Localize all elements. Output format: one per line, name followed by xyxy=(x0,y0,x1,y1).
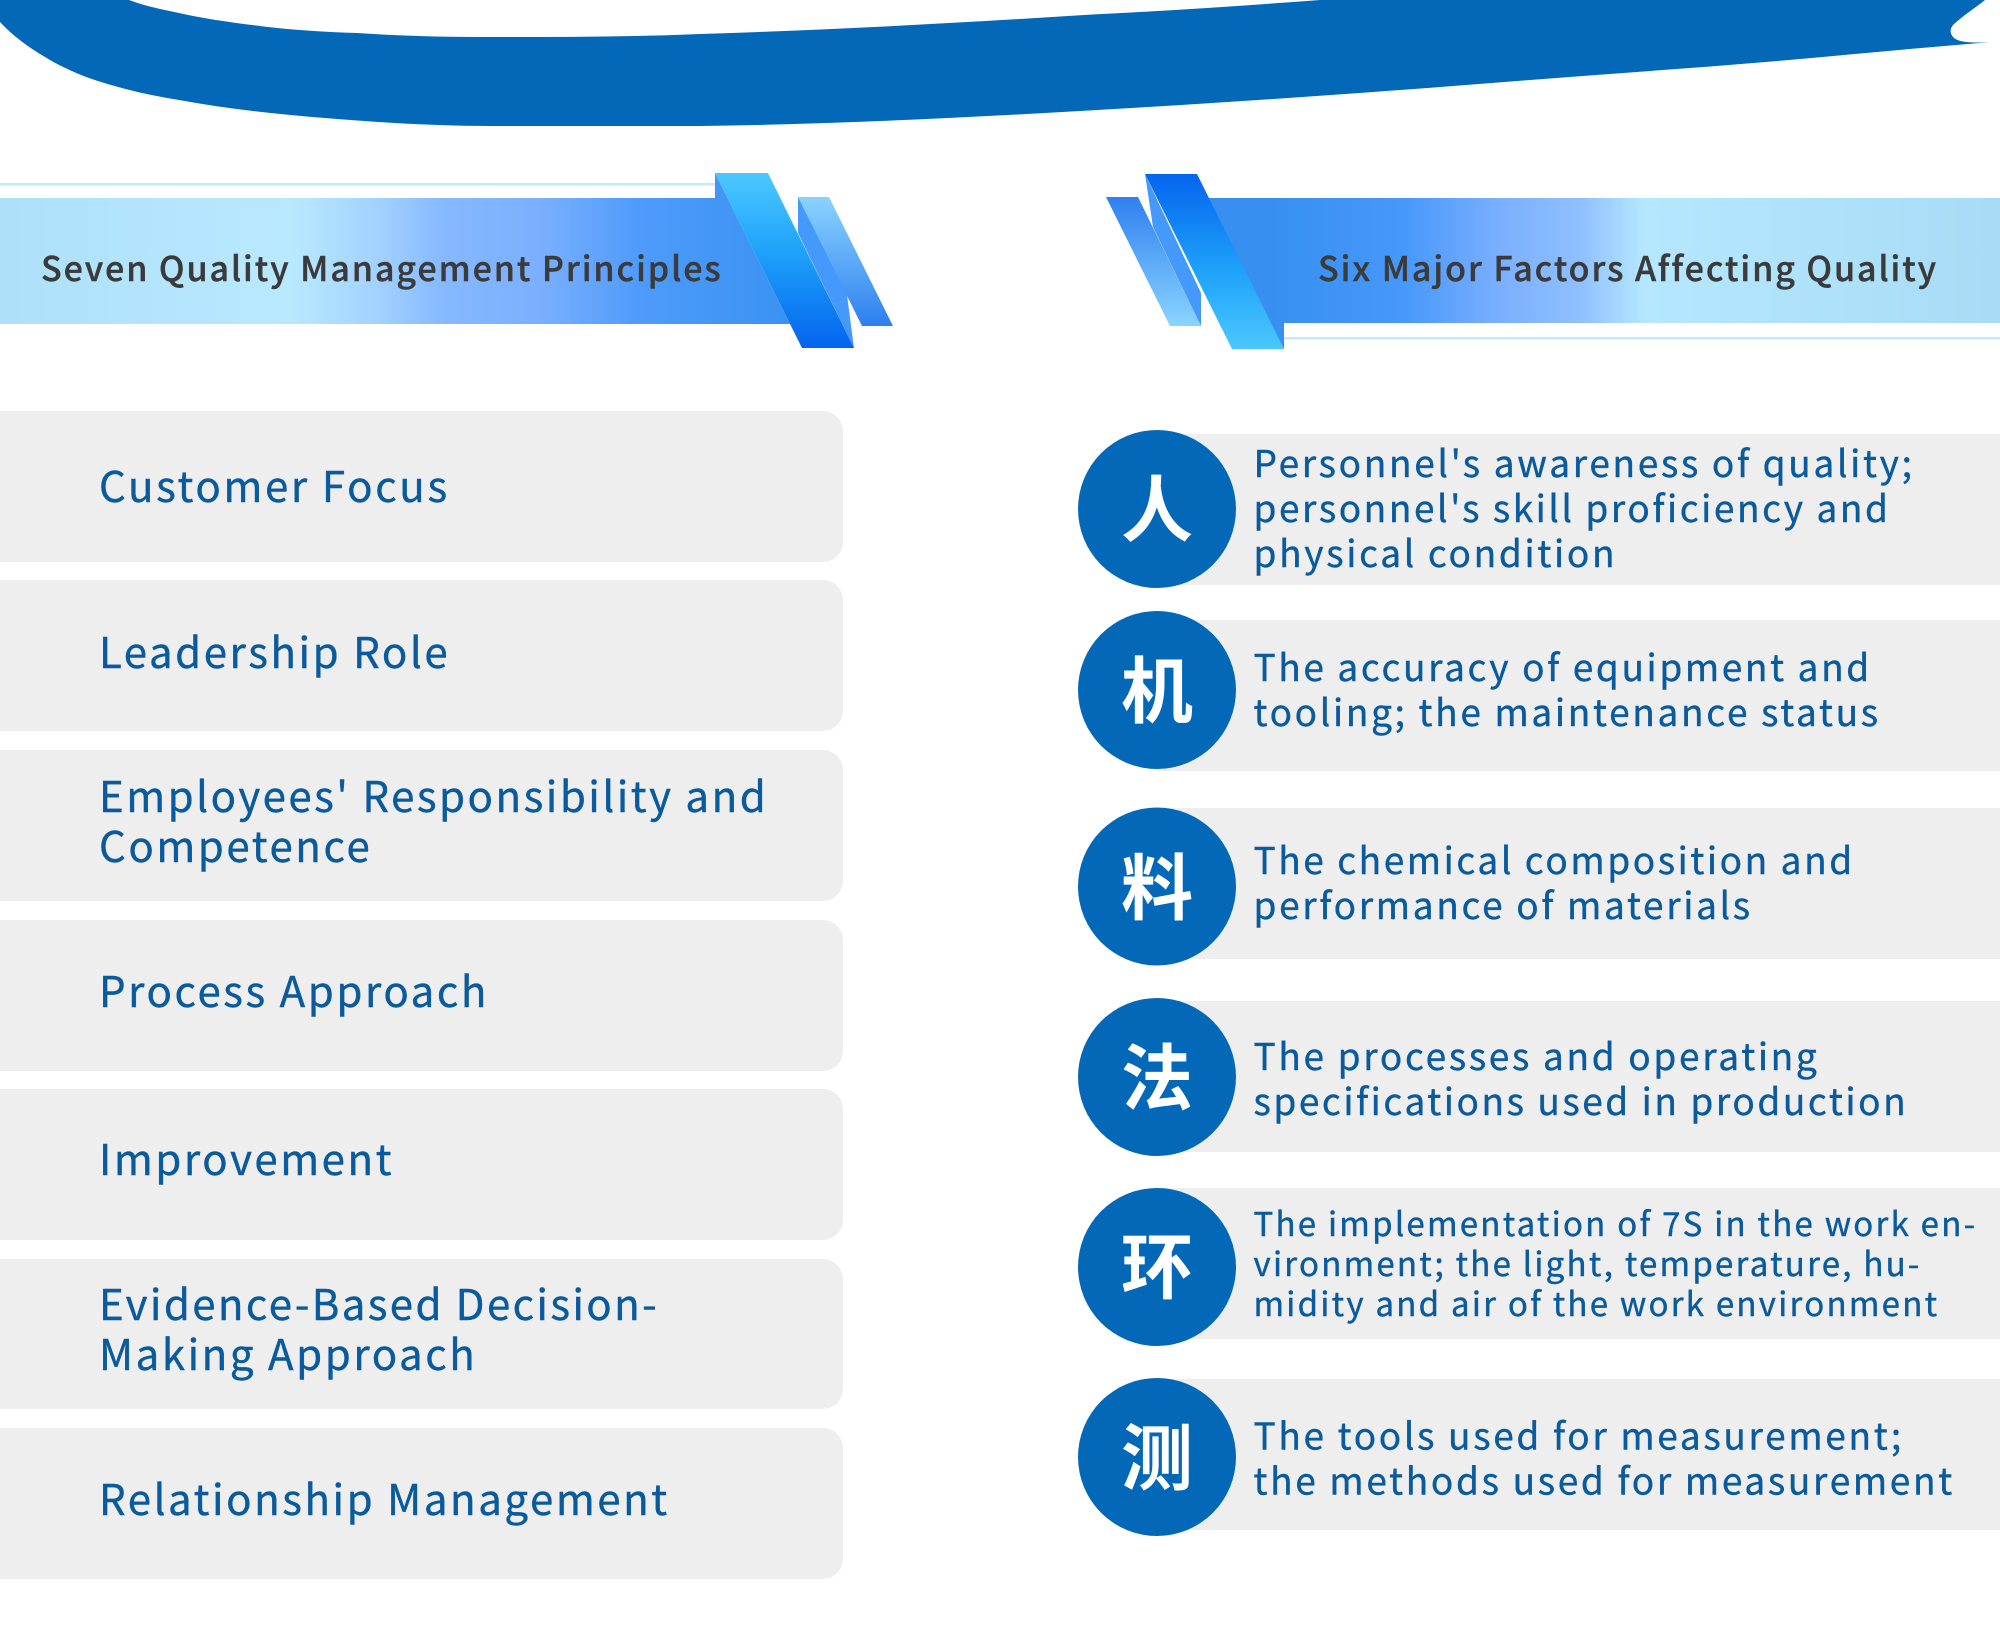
row: material: 料 xyxy=(1121,830,1193,935)
row: environment: 环 xyxy=(1121,1209,1193,1314)
panel: six factors list xyxy=(1078,430,2000,1536)
row: method: 法 xyxy=(1121,1020,1193,1125)
row: employees: Competence xyxy=(99,814,372,875)
row: machine xyxy=(1078,611,2000,771)
row: method: specifications used in production xyxy=(1254,1072,1908,1126)
row: employees: Employees' Responsibility and xyxy=(99,764,768,825)
row: measurement: The tools used for measurement; xyxy=(1254,1406,1904,1460)
header: seven principles xyxy=(0,173,893,348)
row: evidence-based: Making Approach xyxy=(99,1322,477,1383)
row: method: The processes and operating xyxy=(1254,1027,1819,1081)
row: environment: midity and air of the work environment xyxy=(1254,1278,1939,1326)
row: measurement: the methods used for measurement xyxy=(1254,1452,1955,1506)
row: measurement xyxy=(1078,1378,2000,1536)
row: process approach: Process Approach xyxy=(99,959,489,1020)
row: leadership role xyxy=(0,580,843,731)
row: improvement: Improvement xyxy=(99,1127,394,1188)
heading: six factors: Six Major Factors Affecting Quality xyxy=(1318,242,1938,291)
row: evidence-based xyxy=(0,1259,843,1409)
row: machine: tooling; the maintenance status xyxy=(1254,683,1881,737)
row: relationship management: Relationship Management xyxy=(99,1467,670,1528)
row: personnel: physical condition xyxy=(1254,524,1617,578)
panel: seven principles list xyxy=(0,411,843,1579)
top blue swoosh xyxy=(0,0,1992,126)
row: relationship management xyxy=(0,1428,843,1579)
row: personnel: 人 xyxy=(1121,452,1193,557)
row: customer focus xyxy=(0,411,843,562)
row: process approach xyxy=(0,920,843,1071)
row: machine: The accuracy of equipment and xyxy=(1254,638,1872,692)
row: machine: 机 xyxy=(1121,633,1193,738)
row: customer focus: Customer Focus xyxy=(99,454,450,515)
row: material: The chemical composition and xyxy=(1254,831,1855,885)
row: employees xyxy=(0,750,843,901)
row: material xyxy=(1078,808,2000,966)
row: evidence-based: Evidence-Based Decision- xyxy=(99,1272,659,1333)
heading: seven principles: Seven Quality Management Principles xyxy=(41,242,723,291)
row: personnel: personnel's skill proficiency and xyxy=(1254,479,1890,533)
row: improvement xyxy=(0,1089,843,1240)
row: personnel: Personnel's awareness of quality; xyxy=(1254,434,1915,488)
row: environment: vironment; the light, temperature, hu- xyxy=(1254,1238,1922,1286)
row: personnel xyxy=(1078,430,2000,588)
header: six factors xyxy=(1106,174,2000,349)
row: material: performance of materials xyxy=(1254,876,1753,930)
row: environment: The implementation of 7S in the work en- xyxy=(1254,1198,1977,1246)
row: leadership role: Leadership Role xyxy=(99,620,450,681)
row: measurement: 测 xyxy=(1121,1400,1193,1505)
row: environment xyxy=(1078,1188,2000,1346)
row: method xyxy=(1078,998,2000,1156)
